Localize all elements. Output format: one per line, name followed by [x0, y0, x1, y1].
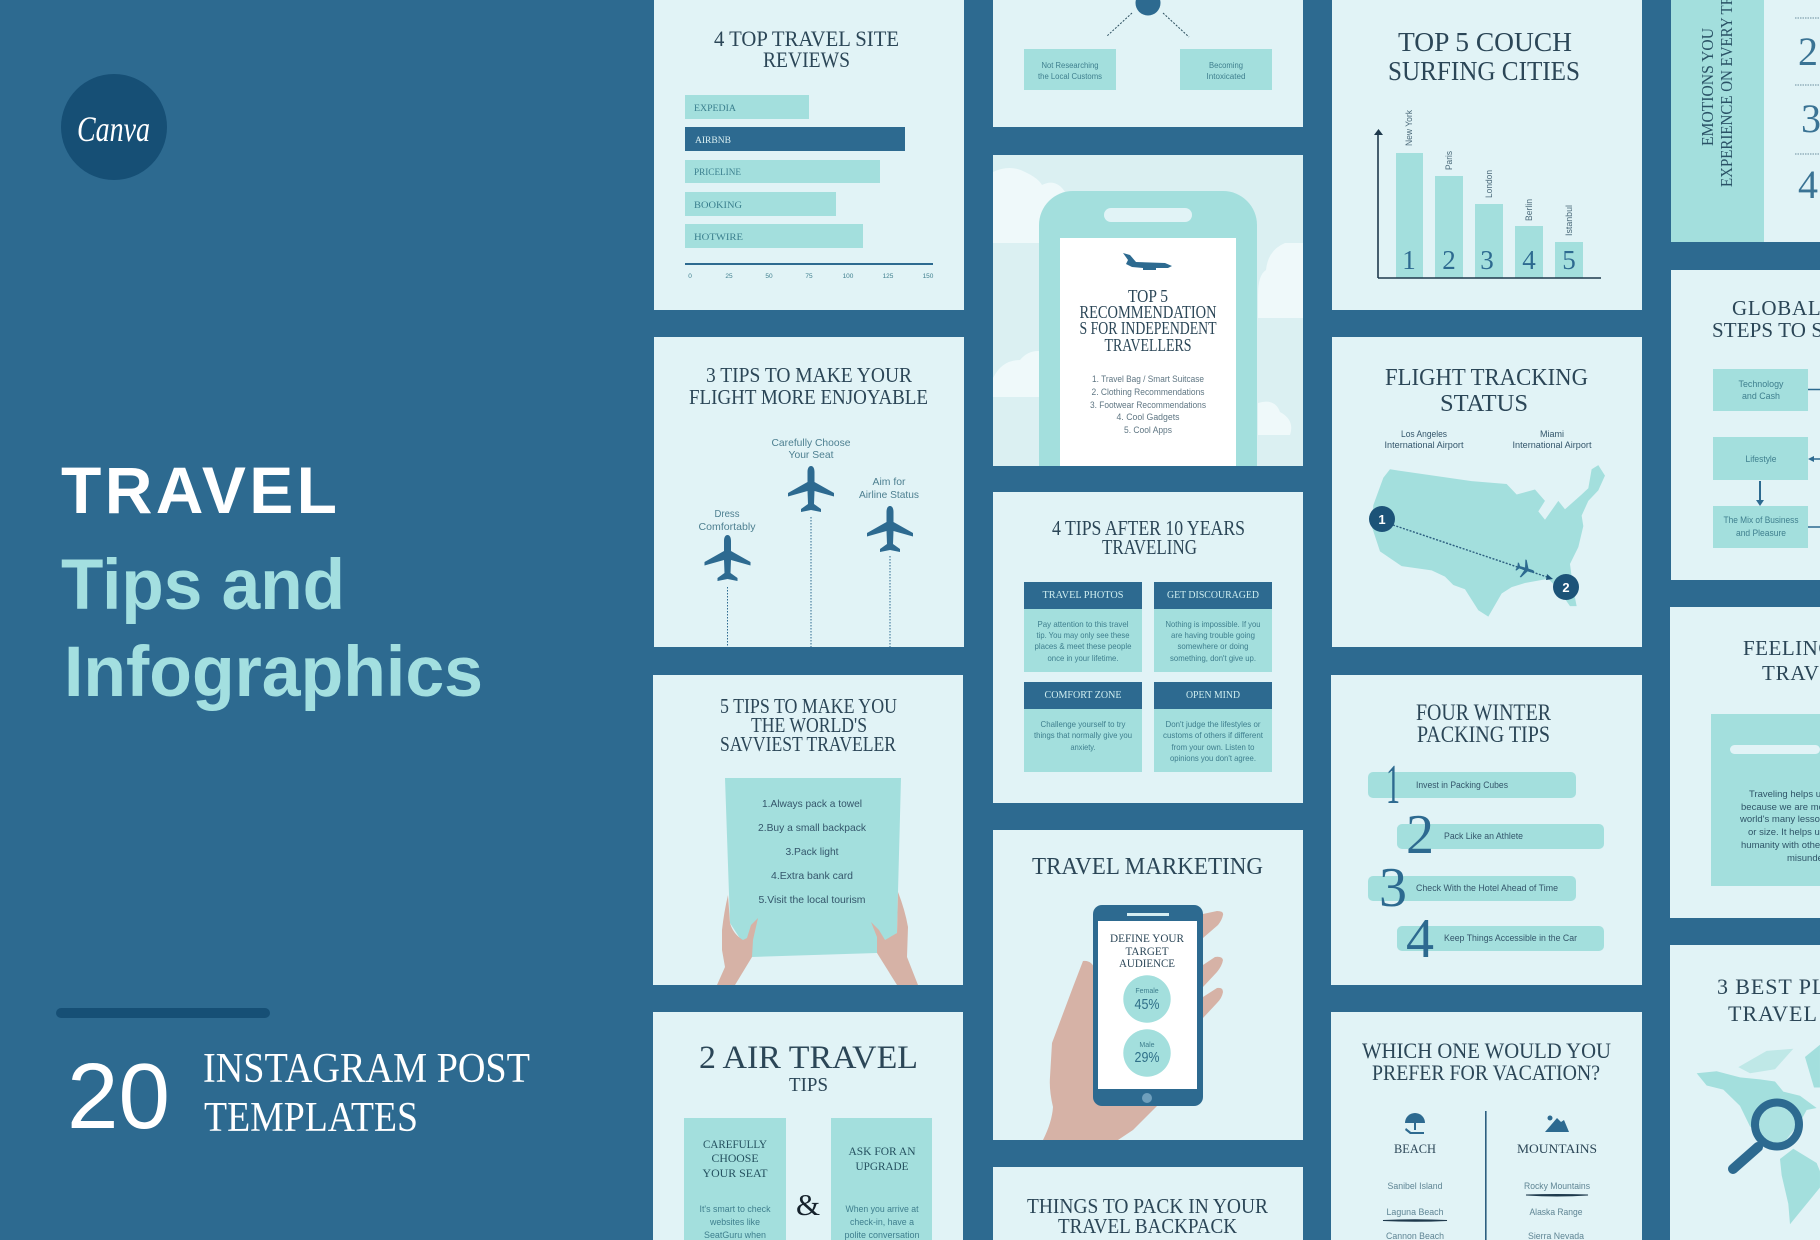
numbers: 2 — [1798, 29, 1818, 74]
tip 2 — [1397, 804, 1604, 866]
phone heading: DEFINE YOUR — [1110, 933, 1184, 945]
bar chart — [1374, 110, 1601, 278]
recommendation list: 3. Footwear Recommendations — [1090, 400, 1206, 410]
subtitle: instagram post templates — [203, 1046, 530, 1141]
world map — [1697, 1045, 1820, 1224]
teal side band — [1671, 0, 1764, 242]
marker 2 — [1553, 574, 1579, 600]
tip card: travel photos: places & meet these people — [1034, 641, 1132, 651]
box: intoxicated: Intoxicated — [1206, 72, 1246, 81]
tip card: travel photos: Pay attention to this travel — [1038, 619, 1129, 629]
tip 1: 1 — [1386, 754, 1400, 816]
bar chart: 50 — [765, 273, 773, 280]
subtitle: instagram post templates: INSTAGRAM POST — [203, 1046, 530, 1092]
paper held in hands: 3.Pack light — [786, 846, 839, 858]
stat: male: 29% — [1134, 1050, 1160, 1066]
tip card: open mind: customs of others if different — [1163, 730, 1264, 740]
flight route — [1393, 525, 1553, 581]
tip box: seat: websites like — [709, 1217, 760, 1227]
column: mountains: Rocky Mountains — [1524, 1181, 1590, 1192]
box: local customs: Not Researching — [1042, 61, 1098, 70]
tip 1 — [1368, 754, 1576, 816]
bar chart: Berlin — [1524, 199, 1534, 221]
heading: PACKING TIPS — [1417, 722, 1550, 747]
panel: travel marketing — [993, 830, 1303, 1140]
panel: four tips after ten years — [993, 492, 1303, 803]
heading: 2 AIR TRAVEL — [699, 1040, 918, 1076]
heading — [1717, 974, 1820, 1026]
heading: 3 TIPS TO MAKE YOUR — [706, 363, 912, 387]
heading — [1388, 27, 1580, 86]
bar chart: 0 — [688, 273, 692, 280]
recommendation list: 5. Cool Apps — [1124, 425, 1172, 435]
tip box: upgrade: polite conversation — [844, 1230, 920, 1240]
panel: mistakes diagram — [993, 0, 1303, 127]
heading: tips and infographics: Infographics — [64, 633, 483, 712]
bar chart: EXPEDIA — [694, 104, 736, 114]
tip card: get discouraged: GET DISCOURAGED — [1167, 590, 1259, 601]
icon: Canva logo — [61, 74, 167, 180]
tip 4: Keep Things Accessible in the Car — [1444, 933, 1577, 943]
tip card: open mind — [1154, 682, 1272, 772]
map: United States — [1372, 465, 1605, 617]
heading — [720, 694, 897, 756]
tip card: get discouraged — [1154, 582, 1272, 672]
heading: WHICH ONE WOULD YOU — [1362, 1038, 1611, 1063]
panel: best places to travel — [1670, 945, 1820, 1240]
column: mountains: MOUNTAINS — [1517, 1141, 1597, 1156]
panel: global travel steps — [1671, 270, 1820, 580]
recommendation list: 2. Clothing Recommendations — [1092, 387, 1205, 397]
box: technology — [1713, 369, 1808, 411]
box: local customs — [1024, 49, 1116, 90]
stat: female — [1123, 975, 1171, 1023]
bar chart: 150 — [923, 273, 934, 280]
airport labels: Miami — [1540, 429, 1564, 439]
bar chart: Paris — [1444, 151, 1454, 170]
panel: couch surfing cities — [1332, 0, 1642, 310]
panel: flight tips — [654, 337, 964, 647]
box: lifestyle — [1713, 437, 1808, 480]
icon: mountain and sun — [1545, 1116, 1569, 1132]
heading — [1027, 1194, 1268, 1238]
tip box: seat: CHOOSE — [712, 1151, 758, 1165]
box: business and pleasure: The Mix of Business — [1724, 515, 1799, 526]
box: intoxicated — [1180, 49, 1272, 90]
bar chart: 2 — [1442, 245, 1456, 275]
marker 2: 2 — [1562, 580, 1570, 595]
tip card: get discouraged: something, don't give up. — [1170, 653, 1256, 663]
heading: THINGS TO PACK IN YOUR — [1027, 1194, 1268, 1218]
box: business and pleasure: and Pleasure — [1736, 528, 1786, 539]
tip 3: Check With the Hotel Ahead of Time — [1416, 883, 1558, 893]
column: mountains — [1517, 1141, 1597, 1240]
panel: things to pack — [993, 1167, 1303, 1240]
icon: magnifying glass — [1733, 1102, 1799, 1169]
bar chart: AIRBNB — [695, 136, 731, 146]
column: beach — [1383, 1141, 1447, 1240]
column: mountains: Alaska Range — [1530, 1207, 1582, 1218]
tip labels: Airline Status — [859, 489, 919, 501]
bar chart: Istanbul — [1564, 205, 1574, 236]
tip card: travel photos: once in your lifetime. — [1048, 653, 1118, 663]
heading — [1712, 296, 1820, 342]
heading — [699, 1040, 918, 1096]
heading: TRAVEL BACKPACK — [1058, 1214, 1237, 1238]
phone heading: TARGET — [1126, 946, 1168, 958]
panel: emotions on every trip — [1671, 0, 1820, 242]
tip 2: Pack Like an Athlete — [1444, 831, 1523, 841]
bar chart: London — [1484, 170, 1494, 198]
tip card: comfort zone: COMFORT ZONE — [1044, 690, 1122, 701]
tip card: get discouraged: somewhere or doing — [1178, 641, 1249, 651]
stat: female: 45% — [1134, 997, 1160, 1013]
phone heading — [1110, 933, 1184, 970]
subtitle: instagram post templates: TEMPLATES — [204, 1095, 418, 1141]
tip labels: Carefully Choose — [772, 437, 851, 449]
tip box: upgrade: check-in, have a — [850, 1217, 914, 1227]
tip card: open mind: from your own. Listen to — [1172, 742, 1255, 752]
paper held in hands: 4.Extra bank card — [771, 870, 853, 882]
tip box: upgrade: UPGRADE — [856, 1159, 908, 1173]
marker 1 — [1369, 506, 1395, 532]
panel: winter packing tips — [1331, 675, 1642, 985]
column: beach: BEACH — [1394, 1141, 1436, 1156]
paper held in hands: 5.Visit the local tourism — [758, 894, 866, 906]
heading — [1743, 636, 1820, 685]
panel: cover text — [56, 74, 530, 1148]
numbers: 4 — [1798, 162, 1818, 207]
phone heading: RECOMMENDATION — [1080, 302, 1217, 322]
box: technology: and Cash — [1742, 391, 1780, 402]
tip card: travel photos: TRAVEL PHOTOS — [1042, 590, 1124, 601]
clouds — [993, 168, 1303, 435]
ampersand: & — [796, 1187, 820, 1222]
panel: recommendations phone — [993, 155, 1303, 466]
heading: REVIEWS — [763, 47, 850, 72]
phone heading: AUDIENCE — [1119, 958, 1175, 970]
rotated heading — [1698, 0, 1736, 187]
airport labels: Los Angeles — [1401, 429, 1447, 439]
airport labels — [1384, 429, 1592, 450]
heading: SURFING CITIES — [1388, 56, 1580, 86]
panel: air travel tips — [653, 1012, 963, 1240]
number of templates: 20 — [67, 1044, 170, 1148]
tip 2: 2 — [1406, 804, 1434, 866]
tip labels: Aim for — [872, 476, 906, 488]
box: technology: Technology — [1738, 379, 1784, 390]
bar chart: 3 — [1480, 245, 1494, 275]
heading: TIPS — [789, 1074, 828, 1096]
heading — [1385, 365, 1588, 417]
bar chart: 4 — [1522, 245, 1536, 275]
icon: beach umbrella — [1405, 1113, 1425, 1134]
tip labels: Comfortably — [698, 521, 756, 533]
phone — [1039, 191, 1257, 466]
bar chart: 100 — [843, 273, 854, 280]
tip card: comfort zone: things that normally give you — [1034, 730, 1132, 740]
phone heading: S FOR INDEPENDENT — [1080, 318, 1217, 338]
icon: planes with dotted trails — [704, 466, 913, 647]
node with dashed connectors — [1107, 0, 1189, 37]
tip card: comfort zone: Challenge yourself to try — [1040, 719, 1126, 729]
bar chart — [685, 95, 934, 280]
heading: tips and infographics — [61, 546, 483, 712]
numbers — [1798, 29, 1820, 207]
tip labels — [698, 437, 919, 533]
bar chart: 125 — [883, 273, 894, 280]
tip card: comfort zone — [1024, 682, 1142, 772]
stat: female: Female — [1135, 988, 1159, 995]
heading: FLIGHT TRACKING — [1385, 365, 1588, 391]
box: local customs: the Local Customs — [1038, 72, 1102, 81]
recommendation list: 1. Travel Bag / Smart Suitcase — [1092, 374, 1204, 384]
heading: TRAVELING — [1102, 535, 1197, 559]
bar chart: 1 — [1402, 245, 1416, 275]
tip card: open mind: Don't judge the lifestyles or — [1166, 719, 1261, 729]
box: intoxicated: Becoming — [1209, 61, 1243, 70]
tip card: get discouraged: are having trouble going — [1171, 630, 1255, 640]
tip card: get discouraged: Nothing is impossible. If you — [1166, 619, 1261, 629]
tip box: upgrade — [831, 1118, 932, 1240]
recommendation list: 4. Cool Gadgets — [1116, 412, 1180, 422]
quote card — [1711, 714, 1820, 886]
bar chart: New York — [1404, 110, 1414, 146]
tip labels: Your Seat — [788, 449, 834, 461]
heading: 4 TOP TRAVEL SITE — [714, 26, 899, 51]
tip card: travel photos: tip. You may only see these — [1036, 630, 1130, 640]
tip card: open mind: opinions you don't agree. — [1170, 753, 1256, 763]
bar chart: 25 — [725, 273, 733, 280]
tip card: comfort zone: anxiety. — [1070, 742, 1096, 752]
stat: male: Male — [1139, 1042, 1155, 1049]
recommendation list — [1090, 374, 1206, 435]
heading: STATUS — [1440, 391, 1528, 417]
panel: vacation preference — [1331, 1012, 1642, 1240]
rotated heading: EMOTIONS YOU — [1698, 28, 1717, 146]
heading: tips and infographics: Tips and — [61, 546, 345, 625]
box: lifestyle: Lifestyle — [1746, 454, 1776, 465]
divider — [1485, 1111, 1487, 1240]
tip card: open mind: OPEN MIND — [1186, 690, 1240, 701]
icon: side-view plane — [1123, 253, 1172, 270]
tip box: seat: CAREFULLY — [703, 1137, 767, 1151]
divider bar — [56, 1008, 270, 1018]
column: beach: Laguna Beach — [1386, 1207, 1444, 1218]
panel: feelings when traveling — [1670, 607, 1820, 918]
heading: travel: TRAVEL — [61, 453, 337, 527]
tip box: upgrade: ASK FOR AN — [848, 1144, 916, 1158]
arrows — [1756, 390, 1820, 527]
tip box: seat: SeatGuru when — [704, 1230, 766, 1240]
panel: flight tracking — [1332, 337, 1642, 647]
bar chart: 5 — [1562, 245, 1576, 275]
heading — [1362, 1038, 1611, 1085]
phone heading — [1080, 286, 1217, 355]
hand holding phone — [1043, 905, 1223, 1140]
bar chart: HOTWIRE — [694, 233, 743, 243]
heading — [714, 26, 899, 72]
heading: FOUR WINTER — [1416, 700, 1552, 725]
heading: PREFER FOR VACATION? — [1372, 1060, 1600, 1085]
bar chart: 75 — [805, 273, 813, 280]
box: business and pleasure — [1713, 506, 1808, 548]
dashed rules — [1795, 18, 1820, 154]
stat: male — [1123, 1029, 1171, 1077]
panel: savviest traveler tips — [653, 675, 963, 985]
heading: THE WORLD'S — [751, 713, 867, 737]
marker 1: 1 — [1378, 512, 1386, 527]
phone heading: TRAVELLERS — [1104, 335, 1192, 355]
paper held in hands: 1.Always pack a towel — [762, 798, 862, 810]
tip 3 — [1368, 857, 1576, 919]
tip labels: Dress — [714, 508, 740, 520]
tip box: seat: It's smart to check — [700, 1204, 771, 1214]
icon: Canva logo: Canva — [77, 109, 150, 149]
airport labels: International Airport — [1384, 440, 1464, 450]
tip 3: 3 — [1379, 857, 1407, 919]
tip 4: 4 — [1406, 908, 1434, 970]
heading — [1052, 516, 1245, 559]
heading — [689, 363, 928, 409]
heading: FLIGHT MORE ENJOYABLE — [689, 385, 928, 409]
panel: travel site reviews — [654, 0, 964, 310]
heading: TRAVEL MARKETING — [1032, 854, 1263, 880]
tip card: travel photos — [1024, 582, 1142, 672]
column: beach: Sanibel Island — [1388, 1181, 1442, 1192]
phone heading: TOP 5 — [1128, 286, 1168, 306]
tip 1: Invest in Packing Cubes — [1416, 780, 1508, 790]
tip 4 — [1397, 908, 1604, 970]
tip box: seat: YOUR SEAT — [702, 1166, 768, 1180]
heading: 4 TIPS AFTER 10 YEARS — [1052, 516, 1245, 540]
tip box: seat — [684, 1118, 786, 1240]
bar chart: PRICELINE — [694, 168, 741, 178]
paper held in hands: 2.Buy a small backpack — [758, 822, 867, 834]
airport labels: International Airport — [1512, 440, 1592, 450]
heading: SAVVIEST TRAVELER — [720, 732, 896, 756]
tip box: upgrade: When you arrive at — [846, 1204, 919, 1214]
heading: TOP 5 COUCH — [1398, 27, 1572, 57]
heading: 5 TIPS TO MAKE YOU — [720, 694, 897, 718]
bar chart: BOOKING — [694, 201, 742, 211]
heading — [1416, 700, 1552, 747]
paper held in hands — [717, 778, 918, 985]
